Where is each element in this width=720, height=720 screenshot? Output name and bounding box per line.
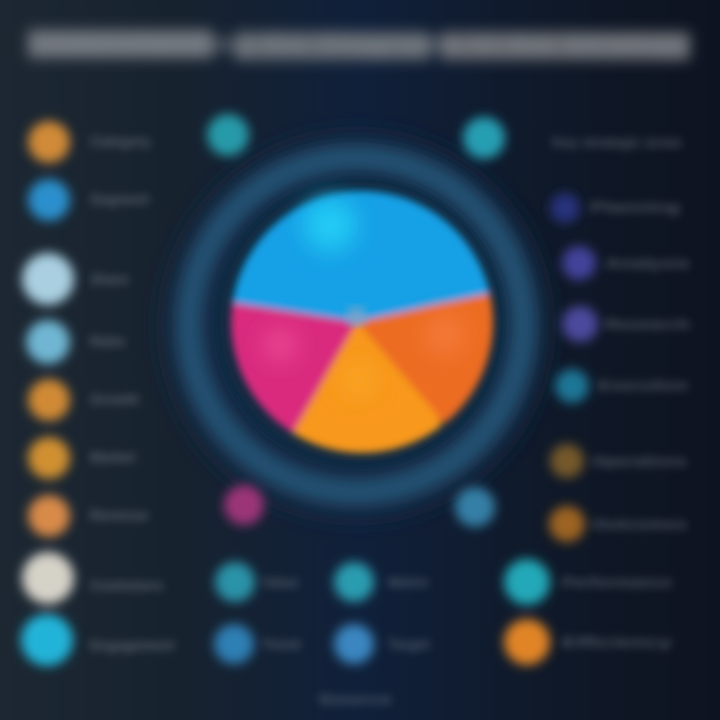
- legend labels: Category: [90, 133, 151, 149]
- legend labels: [262, 574, 672, 652]
- legend labels: Market: [90, 449, 135, 465]
- legend labels: Execution: [598, 377, 688, 393]
- title: Understanding the Diagrams in the Strategy: [30, 30, 690, 58]
- slice: blue: [227, 185, 496, 330]
- legend labels: Key strategic areas: [552, 134, 682, 150]
- legend labels: Share: [90, 271, 129, 287]
- slice: pink: [224, 294, 360, 438]
- legend labels: Efficiency: [562, 634, 672, 650]
- legend labels: Performance: [562, 574, 672, 590]
- legend labels: Target: [388, 636, 430, 652]
- left column legend: [21, 121, 174, 666]
- legend labels: Outcomes: [592, 516, 687, 532]
- slice: orange: [354, 286, 500, 428]
- legend labels: Growth: [90, 391, 139, 407]
- legend labels: [90, 133, 174, 653]
- legend labels: Operations: [592, 453, 687, 469]
- slice: yellow orange: [288, 320, 447, 460]
- pie centre: [347, 307, 365, 325]
- legend labels: Ratio: [90, 333, 125, 349]
- legend dots: [549, 193, 598, 542]
- legend labels: Analysis: [605, 255, 690, 271]
- orbit dots: [207, 114, 505, 527]
- legend labels: Planning: [590, 199, 680, 215]
- legend dots: [21, 121, 74, 666]
- ring: [189, 158, 523, 492]
- pie highlights: [264, 199, 463, 394]
- bottom legend: [214, 559, 672, 665]
- legend dots: [214, 559, 550, 665]
- legend labels: Trend: [262, 636, 300, 652]
- inner dark band: [220, 182, 500, 462]
- legend labels: Value: [262, 574, 299, 590]
- legend labels: Revenue: [90, 507, 149, 523]
- legend labels: [552, 134, 690, 532]
- central pie chart with rings: [164, 134, 548, 518]
- outer ring glow: [164, 134, 548, 518]
- footer: Source: [318, 691, 392, 707]
- pie slices: [224, 185, 500, 460]
- legend labels: Research: [605, 316, 690, 332]
- right column legend: [549, 134, 690, 542]
- legend labels: Segment: [90, 191, 149, 207]
- legend labels: Engagement: [90, 637, 174, 653]
- legend labels: Customers: [90, 577, 163, 593]
- legend labels: Metric: [388, 574, 429, 590]
